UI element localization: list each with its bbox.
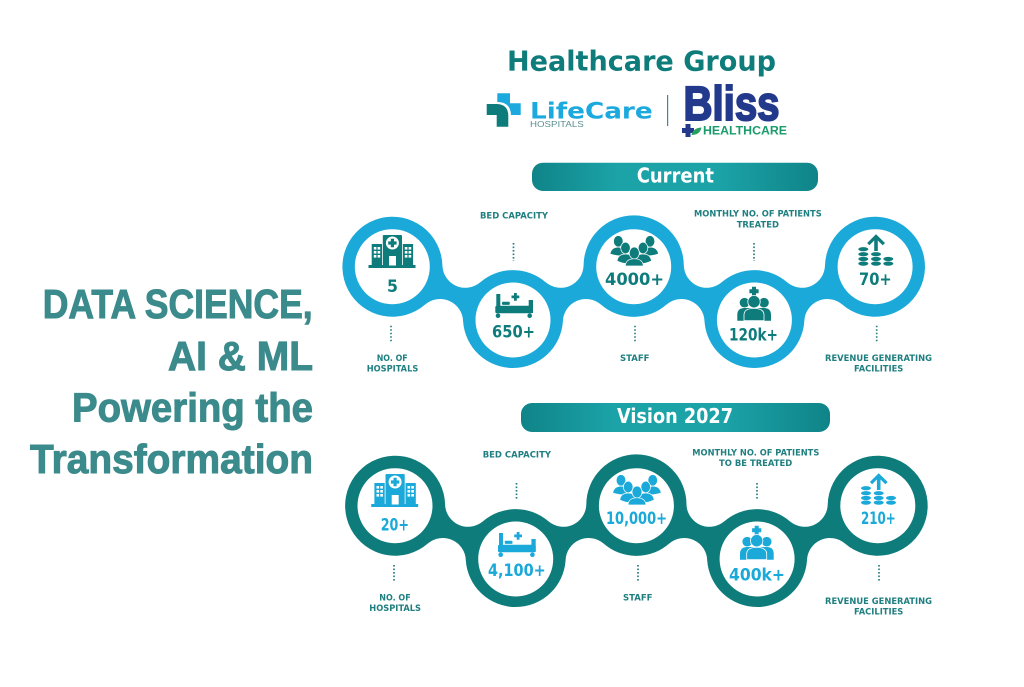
metric: hospitals 2027: 20+ [381,516,409,536]
logo: LifeCare Hospitals: LifeCare [530,99,653,124]
icon: LifeCare cross [487,93,521,127]
metric: staff: STAFF [620,354,650,364]
metric: staff 2027: STAFF [623,594,652,604]
panel: vision 2027 metrics [345,449,932,617]
logo: LifeCare Hospitals [487,93,653,129]
metric: bed capacity 2027 [483,451,551,581]
metric: staff 2027: 10,000+ [606,509,667,529]
metric: revenue generating facilities 2027: FACILITIES [854,607,903,617]
title: Data Science, AI & ML Powering the Transformation: AI & ML [168,333,313,379]
metric: bed capacity: 650+ [492,323,535,343]
title: Data Science, AI & ML Powering the Transformation: DATA SCIENCE, [43,281,313,327]
metric: revenue generating facilities 2027: 210+ [861,509,896,529]
logo: Bliss Healthcare: HEALTHCARE [703,123,787,137]
heading pill: Current [532,163,818,191]
metric: hospitals [367,235,418,375]
metric: staff 2027 [606,474,667,604]
chain: blue linked circles [342,215,925,368]
metric: bed capacity 2027: BED CAPACITY [483,451,551,461]
title: Data Science, AI & ML Powering the Transformation: Transformation [30,436,313,482]
metric: hospitals 2027: HOSPITALS [369,604,421,614]
metric: hospitals: 5 [387,277,398,297]
metric: monthly patients 2027: MONTHLY NO. OF PATIENTS [692,449,819,459]
heading pill: Current: Current [637,164,714,188]
logo: LifeCare Hospitals: HOSPITALS [530,119,584,129]
metric: staff [605,236,664,364]
title: Data Science, AI & ML Powering the Transformation [30,281,313,482]
metric: bed capacity [480,212,548,343]
metric: monthly patients 2027 [692,449,819,586]
metric: hospitals 2027: NO. OF [379,594,411,604]
chain: teal linked circles [345,454,928,607]
metric: hospitals: NO. OF [377,354,408,364]
title: Data Science, AI & ML Powering the Transformation: Powering the [72,385,313,431]
metric: monthly patients: 120k+ [729,326,778,346]
metric: hospitals 2027 [369,474,421,614]
metric: hospitals: HOSPITALS [367,365,418,375]
metric: monthly patients: TREATED [737,220,779,230]
metric: revenue generating facilities 2027 [825,473,932,617]
metric: revenue generating facilities: 70+ [859,270,892,290]
metric: revenue generating facilities 2027: REVENUE GENERATING [825,597,932,607]
metric: revenue generating facilities: REVENUE GENERATING [825,354,932,364]
panel: current metrics [342,210,932,375]
heading pill: Vision 2027: Vision 2027 [617,404,733,428]
heading pill: Vision 2027 [521,403,830,432]
metric: bed capacity: BED CAPACITY [480,212,548,222]
metric: monthly patients 2027: 400k+ [729,566,785,586]
metric: staff: 4000+ [605,270,664,290]
metric: monthly patients [694,210,822,346]
icon: Bliss plus and leaf [682,124,702,137]
metric: revenue generating facilities [825,234,932,375]
metric: monthly patients 2027: TO BE TREATED [719,459,792,469]
logo: Bliss Healthcare: Bliss [684,78,780,131]
metric: monthly patients: MONTHLY NO. OF PATIENTS [694,210,822,220]
metric: bed capacity 2027: 4,100+ [488,561,546,581]
metric: revenue generating facilities: FACILITIES [854,365,903,375]
heading: Healthcare Group: Healthcare Group [507,45,776,78]
